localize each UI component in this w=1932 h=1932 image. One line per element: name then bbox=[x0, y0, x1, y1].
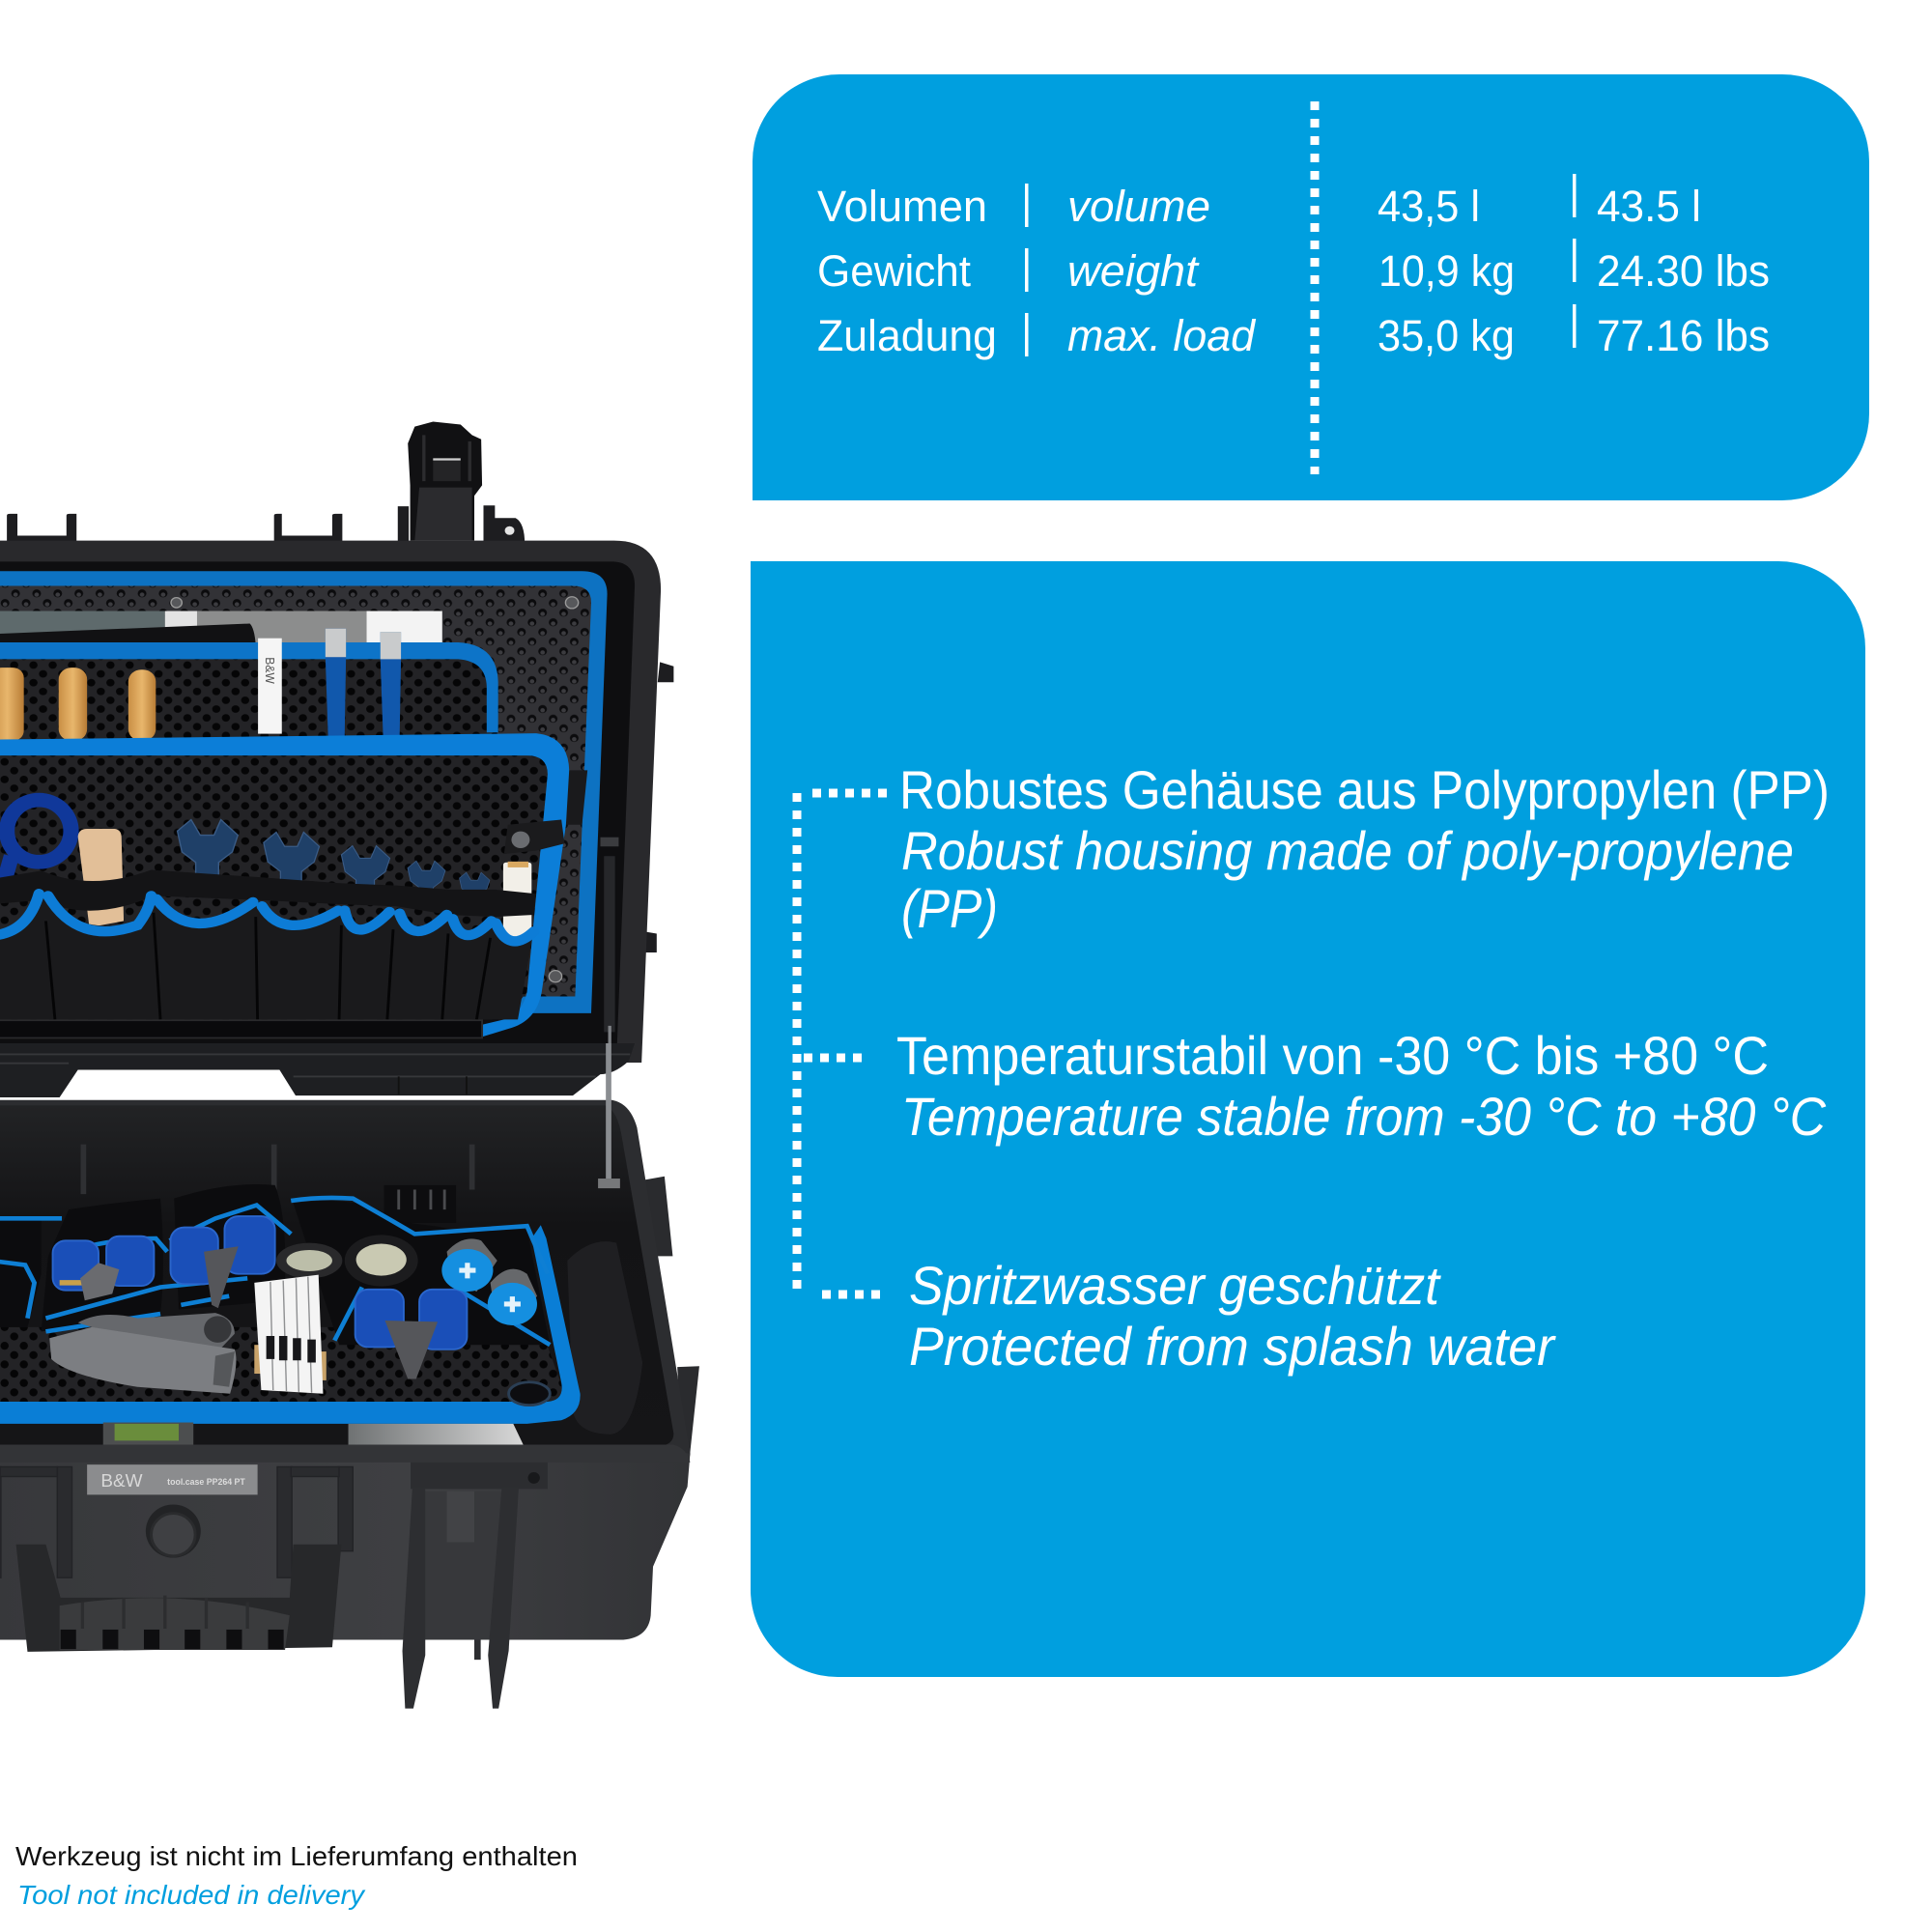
white marker: B&W bbox=[263, 657, 278, 684]
spec labels German: Zuladung bbox=[817, 311, 997, 360]
tool board bbox=[0, 1225, 581, 1424]
lock knob bbox=[146, 1504, 201, 1558]
footnote: Werkzeug ist nicht im Lieferumfang enthalten bbox=[15, 1841, 578, 1871]
lid lower rim bbox=[0, 1043, 635, 1097]
nameplate: tool.case PP264 PT bbox=[167, 1477, 245, 1487]
screwdrivers bbox=[441, 1238, 537, 1325]
perforated board bbox=[0, 585, 591, 997]
feature: temperature bbox=[896, 1025, 1827, 1147]
imperial values bbox=[1597, 182, 1770, 360]
feature: housing: Robustes Gehäuse aus Polypropylen (PP) bbox=[899, 759, 1830, 820]
imperial values: 77.16 lbs bbox=[1597, 311, 1770, 360]
plier heads bbox=[204, 1246, 438, 1379]
base rim bbox=[0, 1100, 690, 1471]
fabric tool rolls bbox=[0, 1184, 550, 1345]
base interior bbox=[0, 1105, 673, 1446]
nameplate: B&W bbox=[100, 1470, 143, 1491]
lid latch bbox=[408, 421, 482, 541]
feature: splash water bbox=[909, 1255, 1556, 1377]
base side lugs bbox=[639, 1177, 699, 1469]
stored paper bbox=[349, 1424, 525, 1448]
spec labels German: Gewicht bbox=[817, 246, 971, 296]
spec labels English bbox=[1067, 182, 1257, 360]
lid hinges and lugs bbox=[7, 505, 673, 952]
hinge block bbox=[384, 1185, 456, 1223]
feature: splash water: Spritzwasser geschützt bbox=[909, 1255, 1441, 1316]
stacking foot bracket bbox=[403, 1463, 548, 1709]
imperial values: 43.5 l bbox=[1597, 182, 1701, 231]
gas strut bbox=[600, 838, 618, 1067]
feature: temperature: Temperature stable from -30 °C to +80 °C bbox=[901, 1086, 1827, 1147]
folding rule bbox=[254, 1275, 327, 1394]
board ring bbox=[509, 1382, 550, 1406]
metric values: 43,5 l bbox=[1378, 182, 1480, 231]
lid shell bbox=[0, 541, 661, 1063]
small clamp bbox=[60, 1263, 119, 1300]
latch brackets bbox=[0, 1466, 353, 1577]
panel background bbox=[753, 74, 1869, 500]
middle pouch bbox=[0, 642, 498, 741]
case lid bbox=[0, 421, 673, 1067]
stored documents bbox=[0, 611, 442, 646]
hammer handle bbox=[78, 829, 124, 927]
feature: temperature: Temperaturstabil von -30 °C bis +80 °C bbox=[896, 1025, 1769, 1086]
front rim bbox=[0, 1444, 690, 1463]
dotted connector lines bbox=[797, 793, 889, 1296]
white marker in pocket bbox=[503, 862, 531, 941]
case front body bbox=[0, 1454, 690, 1639]
value separators bbox=[1573, 174, 1577, 348]
spec labels German bbox=[817, 182, 997, 360]
blue scissors bbox=[0, 800, 71, 895]
board screws bbox=[171, 597, 579, 982]
case base bbox=[0, 1043, 699, 1709]
panel background bbox=[751, 561, 1865, 1677]
closure tab bbox=[504, 819, 564, 854]
spec labels German: Volumen bbox=[817, 182, 987, 231]
nameplate bbox=[87, 1464, 258, 1494]
lid interior bbox=[0, 561, 635, 1063]
footnote: Tool not included in delivery bbox=[17, 1880, 366, 1910]
spec labels English: weight bbox=[1067, 246, 1201, 296]
black shears bbox=[276, 1235, 418, 1287]
strut lower end bbox=[598, 1043, 620, 1188]
tool pockets bbox=[0, 892, 534, 1019]
imperial values: 24.30 lbs bbox=[1597, 246, 1770, 296]
product photo: open tool case bbox=[0, 421, 699, 1709]
spanners bbox=[178, 819, 490, 908]
blue plier grips bbox=[53, 1216, 467, 1350]
lid ring eyelet bbox=[503, 526, 516, 536]
panel: features bbox=[751, 561, 1865, 1677]
feature: housing: Robust housing made of poly-propylene bbox=[901, 820, 1794, 881]
spec labels English: max. load bbox=[1067, 311, 1257, 360]
panel: specifications bbox=[753, 74, 1869, 500]
blue frame bbox=[0, 571, 608, 1013]
metric values: 10,9 kg bbox=[1378, 246, 1515, 296]
footnote bbox=[15, 1841, 578, 1910]
metric values: 35,0 kg bbox=[1378, 311, 1515, 360]
blue roll piping bbox=[0, 1198, 550, 1345]
feature: housing bbox=[899, 759, 1830, 939]
wooden handles bbox=[0, 668, 156, 741]
front pouch bbox=[0, 733, 587, 1037]
feature: housing: (PP) bbox=[901, 878, 998, 939]
wall ribs bbox=[83, 1145, 472, 1194]
pocket flap bbox=[0, 1020, 482, 1037]
carry handle bbox=[16, 1545, 341, 1652]
foam cylinder bbox=[567, 1241, 642, 1435]
spec labels English: volume bbox=[1067, 182, 1210, 231]
elastic strap bbox=[0, 870, 536, 917]
white marker bbox=[258, 639, 282, 734]
blue chisels bbox=[326, 629, 401, 737]
dotted column divider bbox=[1310, 101, 1320, 474]
label separators bbox=[1025, 184, 1028, 356]
spirit level bbox=[103, 1423, 193, 1447]
grey handle tool bbox=[49, 1313, 236, 1394]
metric values bbox=[1378, 182, 1515, 360]
feature: splash water: Protected from splash water bbox=[909, 1316, 1556, 1377]
